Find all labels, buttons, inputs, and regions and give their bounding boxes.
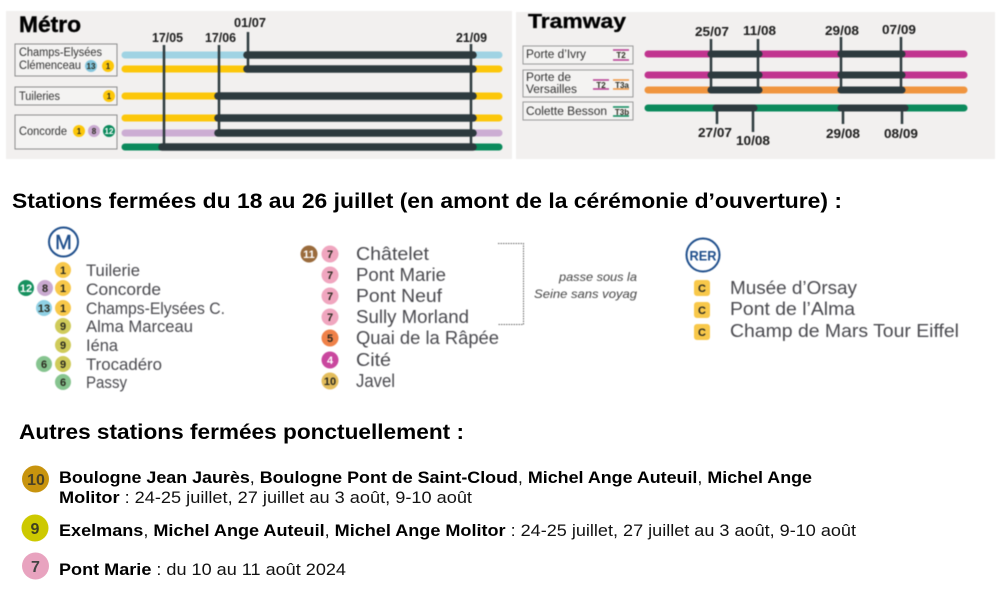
list: métro stations: 9 bbox=[60, 340, 66, 352]
station label: Champs-Elysées Clémenceau: 13 bbox=[87, 62, 96, 71]
tram date labels bbox=[695, 22, 918, 148]
list: line 7 and other stations: 5 bbox=[327, 333, 333, 345]
list: métro stations: Iéna bbox=[86, 336, 119, 355]
list: RER stations: Champ de Mars Tour Eiffel bbox=[730, 321, 959, 341]
list: métro stations: 9 bbox=[60, 321, 66, 333]
station label: Tuileries: 1 bbox=[107, 92, 112, 101]
list: line 7 and other stations: Javel bbox=[356, 371, 395, 391]
badge: line 7 bbox=[22, 552, 49, 580]
list: line 7 and other stations: 7 bbox=[327, 249, 333, 261]
tram date labels: 29/08 bbox=[825, 23, 859, 38]
station label: Concorde: 1 bbox=[77, 127, 82, 136]
list: line 7 and other stations: 10 bbox=[324, 376, 336, 388]
tram date labels: 08/09 bbox=[884, 126, 918, 141]
tram date labels: 10/08 bbox=[736, 133, 770, 148]
list: line 7 and other stations: 11 bbox=[303, 249, 315, 261]
date labels: 17/06 bbox=[205, 30, 236, 45]
heading: other closures: Autres stations fermées ponctuellement : bbox=[19, 421, 464, 444]
list: RER stations: C bbox=[698, 305, 706, 317]
date labels: 21/09 bbox=[456, 30, 487, 45]
list: line 7 and other stations: Sully Morland bbox=[356, 307, 469, 327]
station label: Colette Besson: Colette Besson bbox=[526, 106, 607, 118]
station label: Porte d'Ivry: Porte d’Ivry bbox=[526, 49, 586, 61]
icon: métro bbox=[49, 228, 78, 256]
list: RER stations: Musée d’Orsay bbox=[730, 278, 857, 298]
closure item: line 10: Molitor : 24-25 juillet, 27 juillet au 3 août, 9-10 août bbox=[59, 488, 472, 507]
icon: RER: RER bbox=[690, 248, 716, 264]
closure item: line 10 bbox=[22, 466, 812, 507]
station label: Colette Besson bbox=[523, 102, 633, 120]
list: métro stations: 6 bbox=[60, 377, 66, 389]
closure item: line 7 bbox=[22, 552, 346, 580]
icon: métro: M bbox=[55, 232, 72, 254]
list: métro stations: Alma Marceau bbox=[86, 317, 193, 336]
list: line 7 and other stations: Châtelet bbox=[356, 244, 429, 264]
note: passes under the Seine: passe sous la bbox=[558, 270, 637, 284]
list: RER stations: Pont de l’Alma bbox=[730, 299, 856, 319]
note: passes under the Seine: Seine sans voyag bbox=[534, 287, 637, 301]
tram date labels: 07/09 bbox=[882, 22, 916, 37]
list: line 7 and other stations: Cité bbox=[356, 350, 391, 370]
station label: Champs-Elysées Clémenceau: 1 bbox=[106, 62, 111, 71]
note: passes under the Seine bbox=[534, 270, 637, 301]
list: métro stations: 1 bbox=[60, 303, 66, 315]
station label: Porte de Versailles: T3a bbox=[615, 81, 629, 90]
tram date labels: 27/07 bbox=[698, 125, 732, 140]
badge: line 9 bbox=[22, 514, 48, 542]
station label: Concorde: 8 bbox=[92, 127, 97, 136]
list: RER stations bbox=[686, 238, 959, 341]
tram date labels: 29/08 bbox=[826, 126, 860, 141]
station label: Champs-Elysées Clémenceau: Clémenceau bbox=[19, 60, 81, 72]
list: métro stations: 8 bbox=[42, 283, 48, 295]
panel: tramway closures timeline bbox=[516, 11, 995, 159]
closure item: line 10: Boulogne Jean Jaurès , Boulogne Pont de Saint-Cloud , Michel Ange Auteuil , Michel Ange bbox=[59, 468, 812, 487]
closure periods bbox=[162, 32, 473, 147]
station label: Porte de Versailles: Porte de bbox=[526, 72, 571, 84]
badge: line 9: 9 bbox=[31, 521, 40, 538]
station label: Porte de Versailles: Versailles bbox=[526, 84, 577, 96]
station label: Concorde: Concorde bbox=[19, 126, 67, 138]
tram line bars bbox=[648, 54, 964, 108]
list: line 7 and other stations: 7 bbox=[327, 270, 333, 282]
heading: Tramway: Tramway bbox=[528, 11, 627, 33]
list: métro stations: Trocadéro bbox=[86, 355, 162, 374]
date labels bbox=[152, 15, 487, 45]
station label: Porte d'Ivry: T2 bbox=[616, 51, 626, 60]
list: métro stations: Champs-Elysées C. bbox=[86, 299, 225, 318]
list: métro stations: 6 bbox=[41, 359, 47, 371]
badge: line 10 bbox=[22, 466, 49, 492]
list: métro stations: 12 bbox=[20, 283, 32, 295]
station label: Tuileries: Tuileries bbox=[19, 91, 60, 103]
badge: line 10: 10 bbox=[27, 472, 45, 489]
panel: métro closures timeline bbox=[6, 11, 512, 159]
list: line 7 and other stations: 4 bbox=[327, 355, 334, 367]
station label: Porte de Versailles: T2 bbox=[596, 81, 606, 90]
icon: RER bbox=[686, 238, 720, 272]
list: line 7 and other stations bbox=[300, 244, 637, 391]
list: métro stations: Tuilerie bbox=[86, 261, 140, 280]
bracket: Seine crossing bbox=[498, 244, 524, 324]
station label: Porte d'Ivry bbox=[523, 46, 633, 64]
tram date labels: 11/08 bbox=[743, 23, 776, 38]
list: RER stations: C bbox=[698, 283, 706, 295]
heading: Métro: Métro bbox=[19, 12, 81, 37]
station label: Colette Besson: T3b bbox=[615, 108, 629, 117]
list: line 7 and other stations: Pont Marie bbox=[356, 265, 446, 285]
list: line 7 and other stations: Pont Neuf bbox=[356, 286, 443, 306]
list: RER stations: C bbox=[698, 327, 706, 339]
list: métro stations: 9 bbox=[60, 359, 66, 371]
list: line 7 and other stations: 7 bbox=[327, 312, 333, 324]
station label: Porte de Versailles bbox=[523, 70, 633, 97]
closure item: line 7: Pont Marie : du 10 au 11 août 2024 bbox=[59, 560, 346, 579]
station label: Concorde bbox=[15, 115, 117, 149]
metro line bars bbox=[125, 55, 499, 147]
list: métro stations: Concorde bbox=[86, 280, 161, 299]
list: line 7 and other stations: Quai de la Râpée bbox=[356, 328, 499, 348]
list: métro stations: 1 bbox=[60, 265, 66, 277]
station label: Champs-Elysées Clémenceau bbox=[15, 44, 117, 76]
station label: Champs-Elysées Clémenceau: Champs-Elysées bbox=[19, 47, 102, 59]
station label: Concorde: 12 bbox=[105, 127, 114, 136]
list: line 7 and other stations: 7 bbox=[327, 291, 333, 303]
tram date labels: 25/07 bbox=[695, 24, 729, 39]
list: métro stations: Passy bbox=[86, 373, 127, 392]
list: métro stations bbox=[18, 228, 225, 392]
date labels: 01/07 bbox=[234, 15, 266, 30]
date labels: 17/05 bbox=[152, 30, 183, 45]
station label: Tuileries bbox=[15, 87, 117, 105]
heading: stations closed 18-26 July: Stations fermées du 18 au 26 juillet (en amont de la cérémonie d’ouverture) : bbox=[12, 190, 842, 213]
tram closure periods bbox=[711, 37, 905, 132]
badge: line 7: 7 bbox=[31, 559, 40, 576]
closure item: line 9 bbox=[22, 514, 856, 542]
closure item: line 9: Exelmans , Michel Ange Auteuil , Michel Ange Molitor : 24-25 juillet, 27 juillet au 3 août, 9-10 août bbox=[59, 521, 856, 540]
list: métro stations: 1 bbox=[60, 283, 66, 295]
list: métro stations: 13 bbox=[38, 303, 50, 315]
